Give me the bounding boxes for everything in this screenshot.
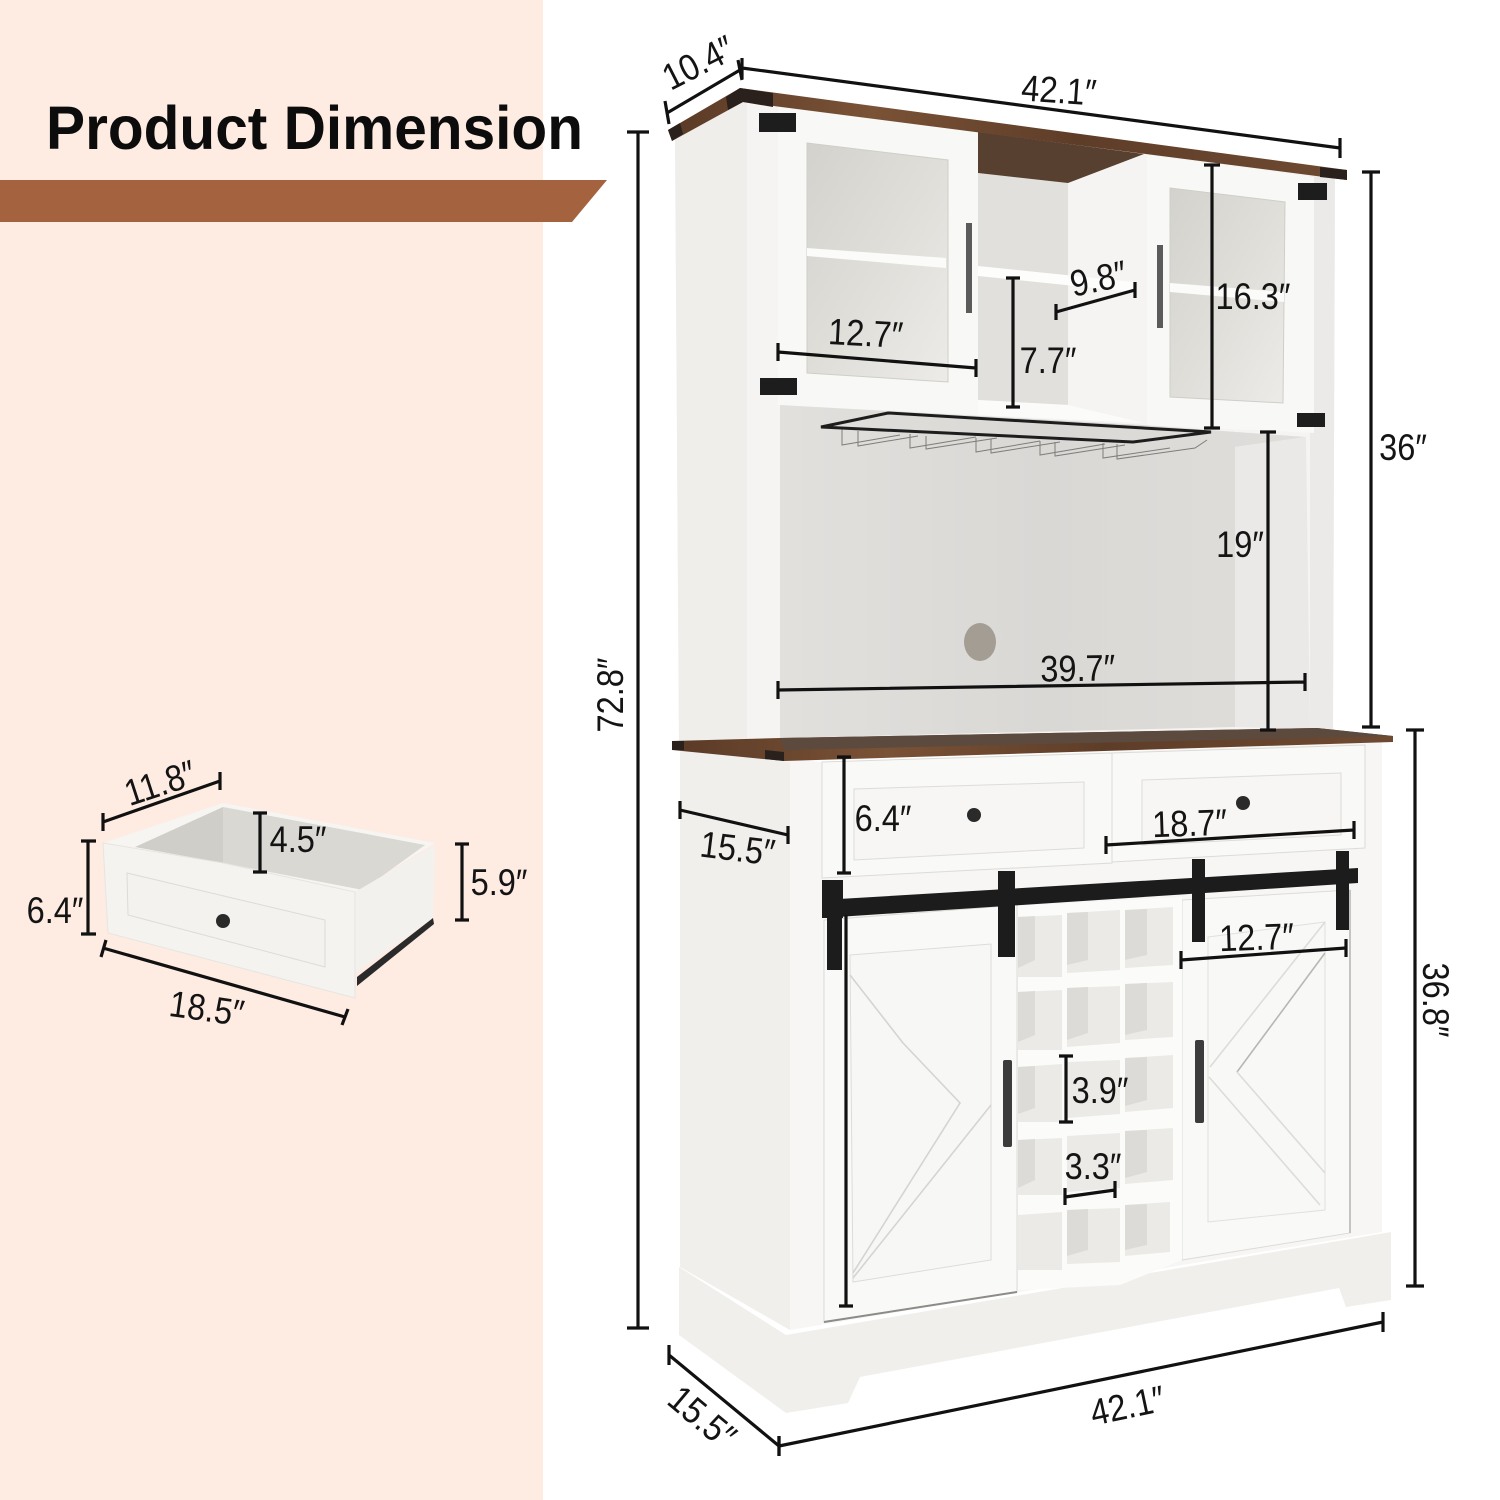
dimension: bottom depth 15.5: 15.5″ [660, 1378, 744, 1458]
open compartment [780, 405, 1310, 738]
dimension: top width 42.1 [742, 58, 1340, 158]
dimension: front height 6.4: 6.4″ [27, 890, 83, 931]
dimension: center shelf 7.7: 7.7″ [1020, 340, 1076, 381]
dimension: shelf depth 9.8: 9.8″ [1066, 253, 1131, 305]
dimension: glass door height 16.3 [1204, 165, 1290, 428]
dimension: wine slot width 3.3: 3.3″ [1065, 1146, 1121, 1187]
dimension: shelf depth 9.8 [1056, 253, 1135, 320]
dimension: side depth 15.5: 15.5″ [698, 824, 777, 874]
dimension: base height 36.8: 36.8″ [1415, 963, 1456, 1037]
dimension: center shelf 7.7 [1006, 278, 1076, 407]
product: drawer [27, 753, 527, 1035]
dimension: top width 42.1: 42.1″ [1020, 68, 1098, 114]
dimension: bottom width 42.1 [779, 1312, 1383, 1456]
drawer front [103, 843, 355, 998]
right door [1182, 890, 1350, 1260]
center open shelves [978, 132, 1147, 423]
dimension: drawer height 6.4 and door height: 6.4″ [855, 798, 911, 839]
dimension: drawer width 18.5 [101, 940, 348, 1035]
background: peach left panel [0, 0, 543, 1500]
cable hole [964, 623, 996, 661]
dimension: interior width 39.7 [778, 647, 1305, 699]
dimension: glass door height 16.3: 16.3″ [1216, 276, 1290, 317]
dimension: total height 72.8: 72.8″ [590, 658, 631, 732]
base unit [672, 728, 1393, 1413]
dimension: bottom depth 15.5 [660, 1345, 779, 1458]
counter slab [672, 728, 1393, 761]
dimension: open height 19: 19″ [1216, 524, 1264, 565]
dimension: drawer width 18.7 [1106, 802, 1354, 854]
drawers [822, 745, 1365, 878]
dimension: interior width 39.7: 39.7″ [1040, 647, 1116, 690]
top slab [668, 88, 1347, 180]
plinth [679, 1232, 1391, 1413]
dimension: hutch height 36: 36″ [1379, 427, 1427, 468]
dimension: side depth 15.5 [680, 801, 788, 874]
left glass door [778, 107, 978, 415]
dimension: total height 72.8 [590, 132, 649, 1328]
drawer slide [357, 918, 434, 986]
dimension: base height 36.8 [1406, 730, 1456, 1286]
dimension: top depth 10.4: 10.4″ [656, 28, 741, 99]
dimension: hutch height 36 [1362, 172, 1427, 727]
dimension: side height 5.9 [455, 844, 527, 920]
wine rack [1018, 897, 1182, 1290]
right glass door [1147, 155, 1314, 433]
dimension: side height 5.9: 5.9″ [471, 862, 527, 903]
dimension: drawer height 6.4 and door height [837, 757, 911, 1306]
glass rack [821, 413, 1211, 459]
hinges [759, 113, 1327, 427]
dimension: door width 12.7 [778, 311, 976, 377]
title banner [0, 180, 607, 222]
drawer panel [127, 873, 325, 967]
dimension: inner height 4.5: 4.5″ [270, 819, 326, 860]
drawer side [355, 845, 435, 973]
hutch upper unit [668, 88, 1347, 745]
left door [824, 905, 1017, 1322]
dimension: drawer width 18.7: 18.7″ [1151, 802, 1228, 846]
drawer interior [103, 803, 435, 892]
dimension: door width 12.7: 12.7″ [827, 311, 904, 356]
dimension: front height 6.4 [27, 841, 96, 934]
drawer knob [216, 914, 230, 928]
dimension: open height 19 [1216, 432, 1276, 730]
dimension: drawer width 18.5: 18.5″ [167, 983, 247, 1035]
barn door rail [822, 851, 1358, 970]
dimension: wine slot height 3.9 [1059, 1056, 1128, 1122]
dimension: lower door width 12.7 [1181, 916, 1346, 969]
dimension: bottom width 42.1: 42.1″ [1087, 1378, 1168, 1434]
dimension: lower door width 12.7: 12.7″ [1218, 916, 1295, 960]
product: cabinet [590, 28, 1456, 1458]
title: Product Dimension [46, 94, 583, 162]
drawer knobs [967, 808, 981, 822]
dimension: inner height 4.5 [253, 813, 326, 872]
dimension: drawer depth 11.8: 11.8″ [119, 753, 201, 814]
dimension: wine slot height 3.9: 3.9″ [1072, 1070, 1128, 1111]
dimension: drawer depth 11.8 [103, 753, 220, 831]
